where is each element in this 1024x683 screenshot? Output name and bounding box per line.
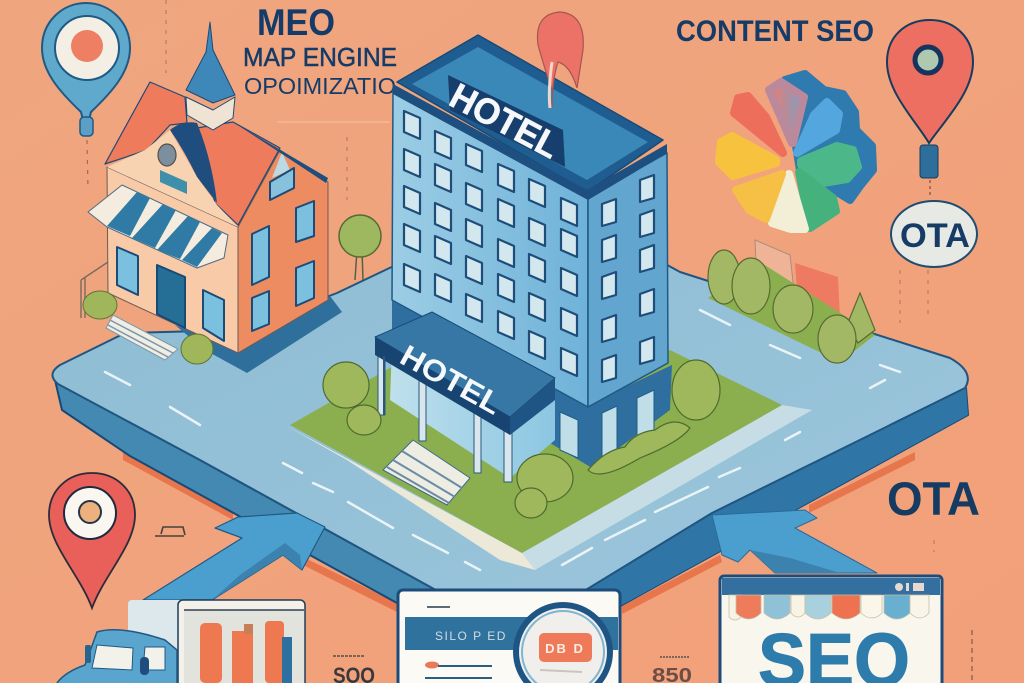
heading: OTA: OTA — [887, 472, 980, 525]
tower left face — [392, 90, 588, 407]
steps — [106, 315, 178, 360]
heading: MEO: MEO — [257, 2, 335, 43]
magnifier: DB D — [545, 641, 585, 656]
entrance steps — [383, 440, 470, 505]
porch canopy — [375, 312, 555, 435]
arrow: right pointing to platform — [712, 510, 877, 573]
tower — [186, 97, 235, 130]
platform side — [55, 380, 968, 668]
shop base — [175, 296, 342, 373]
label: small line above SOO — [333, 655, 365, 657]
chart: colourful pie flower — [719, 74, 873, 229]
lawn — [290, 350, 782, 553]
railing — [81, 262, 108, 318]
heading: optimization: OPOIMIZATIO — [244, 73, 396, 99]
building: small shop — [81, 22, 342, 373]
shrubs — [323, 360, 720, 518]
entrance columns — [378, 352, 512, 482]
arrow: left pointing to platform — [143, 513, 325, 600]
shop windows — [117, 168, 314, 341]
gable sign — [160, 170, 187, 194]
badge: OTA bubble — [891, 201, 977, 267]
bar chart — [200, 621, 292, 683]
tower roof — [397, 35, 663, 192]
tower right face — [588, 153, 668, 407]
faint guide marks — [166, 0, 934, 552]
badge: OTA bubble: OTA — [900, 217, 970, 255]
sidewalk — [283, 424, 535, 570]
roof sign: HOTEL — [443, 75, 567, 166]
left face windows — [404, 111, 577, 376]
entrance glass — [390, 345, 555, 478]
icon: red pin bottom left — [49, 473, 135, 608]
building: hotel tower — [323, 35, 720, 518]
shop door — [157, 265, 185, 328]
porch canopy: HOTEL — [395, 339, 507, 421]
right base windows — [560, 390, 654, 458]
small tree beside house — [339, 215, 381, 280]
awning scallops — [729, 595, 929, 620]
panel: SEO browser — [720, 576, 942, 683]
shop front wall — [107, 167, 238, 353]
roof — [105, 82, 187, 164]
icon: red pin on hotel — [537, 12, 583, 108]
band text: SILO P ED — [435, 629, 507, 643]
heading: map engine: MAP ENGINE — [243, 42, 397, 72]
ground platform with roads — [52, 190, 968, 668]
small garbled mark — [155, 527, 185, 536]
magnifier — [516, 605, 610, 683]
icon: blue map pin top left — [42, 3, 130, 190]
shop side wall — [238, 150, 328, 353]
label: small line above 850 — [660, 656, 690, 658]
road dashes — [105, 305, 900, 570]
tower base — [392, 300, 672, 468]
panel: search browser — [398, 590, 620, 683]
icon: red pin top right — [887, 20, 973, 198]
striped awning — [88, 185, 228, 268]
hedge and red panel on right — [708, 240, 875, 363]
truck cab — [57, 630, 177, 683]
heading: content SEO: CONTENT SEO — [676, 15, 874, 48]
orange shadow stripes — [123, 452, 915, 614]
title bar — [722, 578, 940, 595]
browser controls — [895, 583, 924, 591]
panel: truck with bar chart — [57, 600, 305, 683]
bushes — [83, 291, 117, 319]
right face windows — [602, 175, 654, 382]
gable round window — [158, 144, 176, 166]
pale strip beside lawn — [522, 405, 812, 570]
road surface — [52, 190, 968, 632]
faint dashed connector — [971, 630, 973, 683]
